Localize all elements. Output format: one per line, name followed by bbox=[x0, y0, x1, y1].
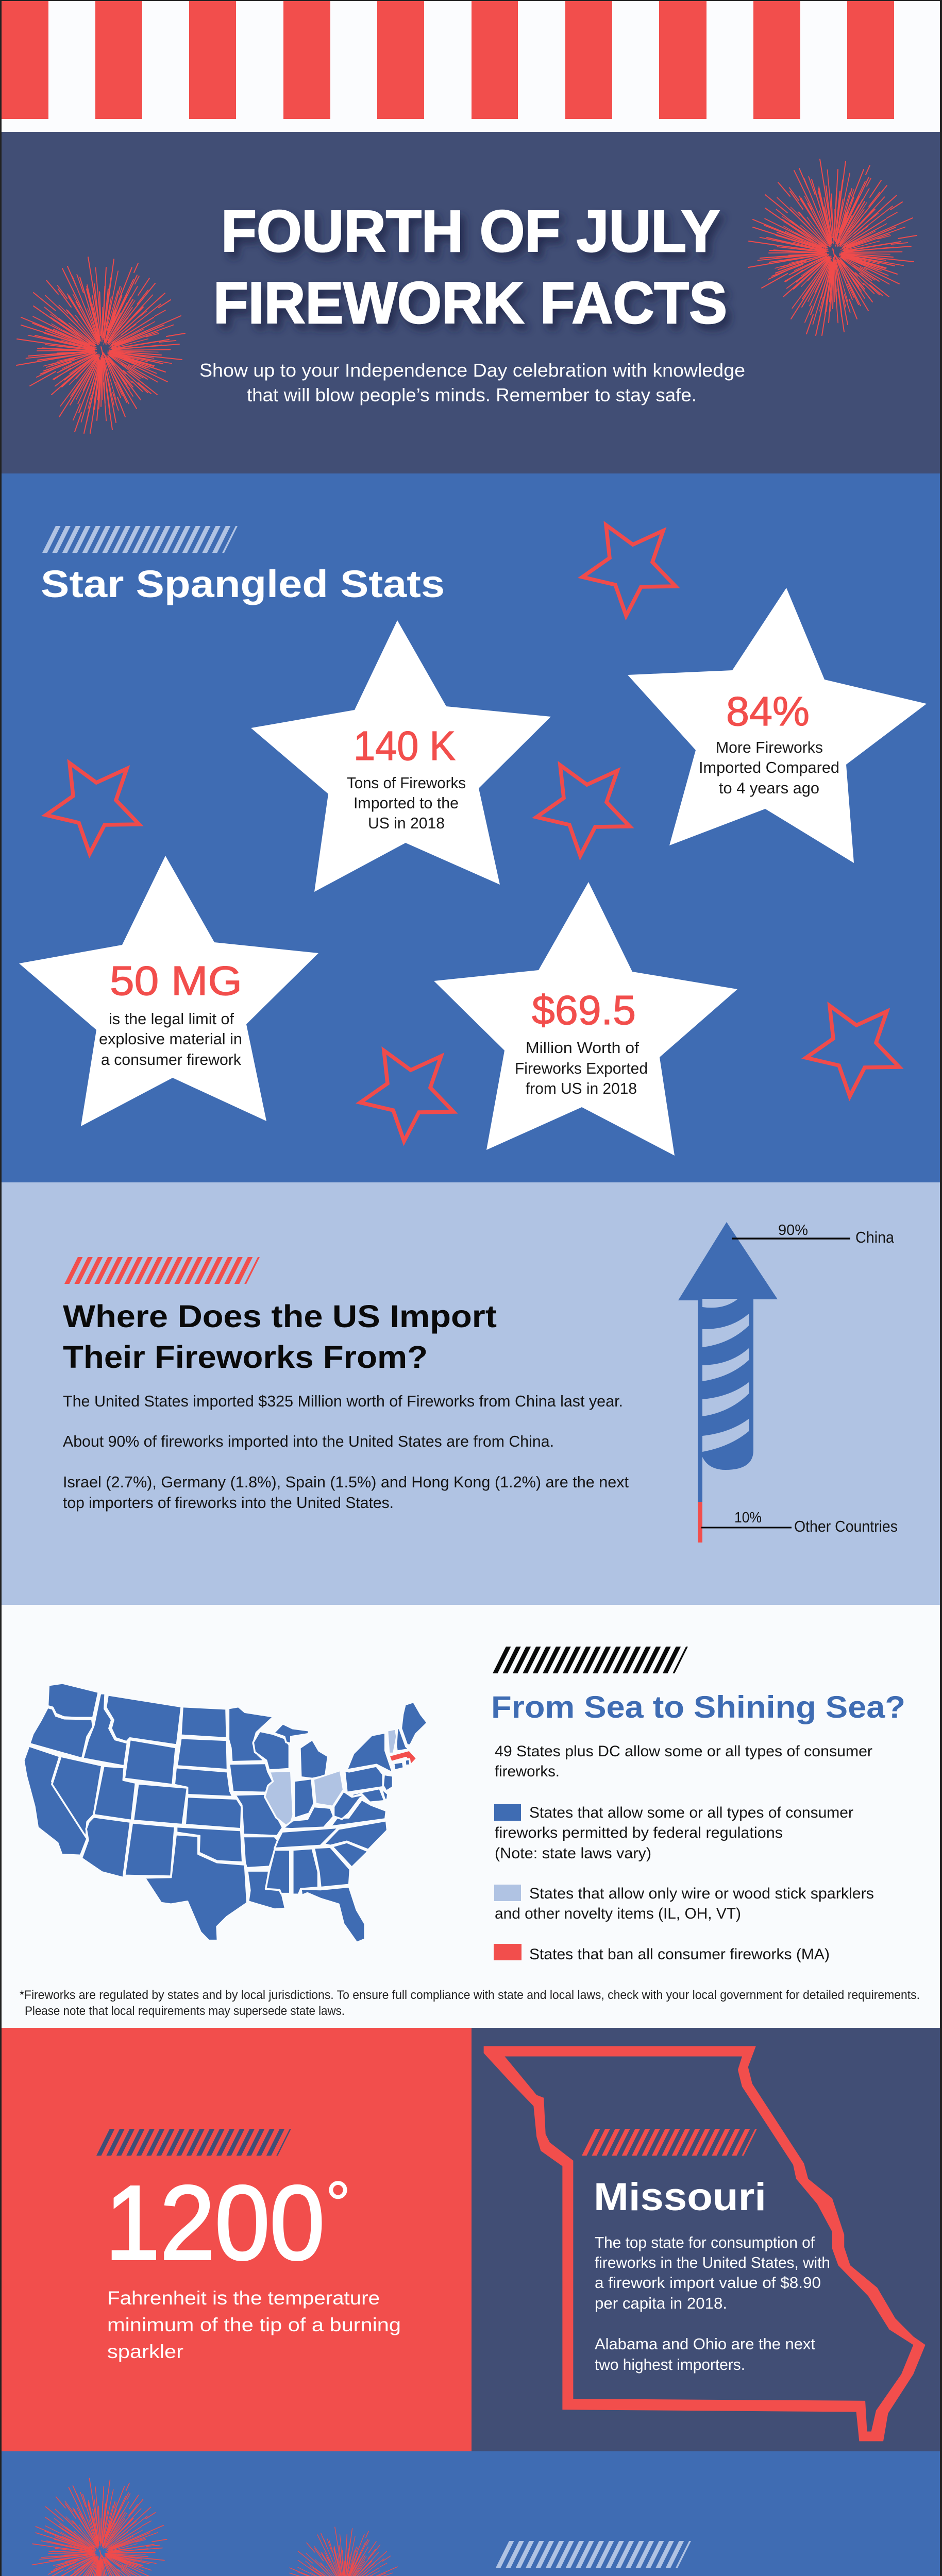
body text: About 90% of fireworks imported into the United States are from China. bbox=[63, 1432, 554, 1450]
legend: banned: States that ban all consumer fireworks (MA) bbox=[529, 1946, 830, 1963]
panel: protect your home bbox=[0, 2451, 942, 2576]
hatch decoration bbox=[588, 2129, 750, 2156]
stat star: $69.5: Million Worth of bbox=[526, 1039, 639, 1057]
hatch decoration bbox=[502, 2541, 684, 2568]
leader: China 90%: China bbox=[855, 1228, 895, 1246]
stat star: $69.5: from US in 2018 bbox=[526, 1079, 637, 1097]
stat star: 50 MG: 50 MG bbox=[110, 958, 242, 1004]
stat star: 84% bbox=[628, 588, 927, 863]
Missouri outline bbox=[484, 2046, 926, 2441]
hatch decoration bbox=[103, 2129, 284, 2156]
stat star: $69.5: Fireworks Exported bbox=[515, 1059, 648, 1077]
outline star bbox=[582, 525, 676, 616]
panel: state map bbox=[0, 1605, 942, 2028]
icon: firework small bbox=[287, 2527, 400, 2576]
hatch decoration bbox=[49, 526, 231, 553]
stat star: $69.5: $69.5 bbox=[532, 987, 636, 1033]
stat star: 140 K: Tons of Fireworks bbox=[347, 774, 466, 792]
body text bbox=[63, 1392, 629, 1512]
panel: sparkler temperature bbox=[0, 2028, 472, 2451]
description: Fahrenheit is the temperature bbox=[107, 2287, 380, 2309]
leader: China 90% bbox=[732, 1222, 895, 1246]
stat star: 50 MG: a consumer firework bbox=[101, 1050, 241, 1069]
intro text: 49 States plus DC allow some or all types of consumer bbox=[495, 1743, 872, 1760]
outline star bbox=[536, 765, 630, 856]
title: FIREWORK FACTS bbox=[213, 270, 727, 336]
leader: other countries 10% bbox=[701, 1510, 898, 1535]
body text: per capita in 2018. bbox=[595, 2294, 727, 2312]
hatch decoration bbox=[499, 1647, 681, 1673]
US map bbox=[24, 1683, 427, 1942]
stat star: 84%: 84% bbox=[726, 688, 810, 734]
heading: Missouri bbox=[594, 2175, 766, 2219]
top stripes bbox=[0, 0, 942, 132]
intro text: fireworks. bbox=[495, 1763, 560, 1780]
heading: From Sea to Shining Sea? bbox=[491, 1690, 905, 1724]
legend: allowed: (Note: state laws vary) bbox=[495, 1845, 651, 1862]
intro text bbox=[495, 1743, 872, 1780]
stat star: 140 K bbox=[251, 620, 551, 892]
stat star: 50 MG bbox=[19, 856, 318, 1126]
footnote: Please note that local requirements may supersede state laws. bbox=[25, 2004, 345, 2018]
legend: allowed: fireworks permitted by federal regulations bbox=[495, 1824, 783, 1841]
outline star bbox=[806, 1006, 899, 1096]
stat star: 84%: Imported Compared bbox=[699, 758, 839, 776]
body text: fireworks in the United States, with bbox=[595, 2253, 830, 2272]
stat star: 50 MG: explosive material in bbox=[99, 1030, 242, 1048]
description bbox=[107, 2287, 401, 2362]
heading: Where Does the US Import bbox=[63, 1299, 497, 1334]
leader: other countries 10%: 10% bbox=[734, 1510, 762, 1526]
stat star: 140 K: Imported to the bbox=[354, 794, 459, 812]
body text: The top state for consumption of bbox=[595, 2233, 815, 2251]
body text: Israel (2.7%), Germany (1.8%), Spain (1.5%) and Hong Kong (1.2%) are the next bbox=[63, 1473, 629, 1491]
rocket chart bbox=[678, 1222, 898, 1543]
leader: other countries 10%: Other Countries bbox=[794, 1517, 898, 1535]
big number: ° bbox=[326, 2169, 350, 2238]
panel: star spangled stats bbox=[0, 473, 942, 1182]
legend: allowed bbox=[494, 1804, 853, 1862]
legend: sparklers only: and other novelty items (IL, OH, VT) bbox=[495, 1905, 741, 1922]
big number: 1200 bbox=[105, 2164, 325, 2282]
subtitle bbox=[199, 360, 745, 405]
icon: firework right bbox=[748, 159, 917, 335]
panel: import sources bbox=[0, 1182, 942, 1605]
legend: allowed: States that allow some or all types of consumer bbox=[529, 1804, 853, 1821]
outline star bbox=[360, 1050, 453, 1141]
icon: firework large bbox=[32, 2478, 167, 2576]
body text: top importers of fireworks into the United States. bbox=[63, 1494, 394, 1512]
stat star: 140 K: 140 K bbox=[354, 723, 456, 769]
legend: sparklers only: States that allow only wire or wood stick sparklers bbox=[529, 1885, 874, 1902]
legend: sparklers only bbox=[494, 1885, 874, 1922]
heading: Their Fireworks From? bbox=[63, 1340, 428, 1375]
stat star: 140 K: US in 2018 bbox=[368, 814, 445, 832]
footnote: *Fireworks are regulated by states and by local jurisdictions. To ensure full compliance with state and local laws, check with your local government for detailed requirements. bbox=[20, 1988, 920, 2002]
heading: Star Spangled Stats bbox=[41, 563, 445, 605]
stat star: 84%: More Fireworks bbox=[716, 738, 823, 756]
stat star: 50 MG: is the legal limit of bbox=[109, 1010, 234, 1028]
body text: Alabama and Ohio are the next bbox=[595, 2335, 815, 2353]
hatch decoration bbox=[71, 1257, 253, 1284]
body text: The United States imported $325 Million worth of Fireworks from China last year. bbox=[63, 1392, 623, 1410]
description: minimum of the tip of a burning bbox=[107, 2314, 401, 2335]
body text: two highest importers. bbox=[595, 2355, 745, 2374]
title bbox=[213, 199, 727, 336]
stat star: 84%: to 4 years ago bbox=[719, 779, 819, 797]
footnote bbox=[20, 1988, 920, 2018]
body text: a firework import value of $8.90 bbox=[595, 2274, 821, 2292]
panel: hero bbox=[0, 132, 942, 473]
body text bbox=[595, 2233, 830, 2374]
title: FOURTH OF JULY bbox=[221, 199, 720, 264]
stat star: $69.5 bbox=[434, 882, 737, 1156]
description: sparkler bbox=[107, 2341, 183, 2362]
subtitle: that will blow people’s minds. Remember to stay safe. bbox=[247, 384, 697, 405]
panel: Missouri bbox=[472, 2028, 942, 2451]
subtitle: Show up to your Independence Day celebration with knowledge bbox=[199, 360, 745, 381]
icon: firework left bbox=[16, 257, 185, 433]
outline star bbox=[46, 763, 139, 854]
leader: China 90%: 90% bbox=[778, 1222, 808, 1239]
heading bbox=[63, 1299, 497, 1375]
